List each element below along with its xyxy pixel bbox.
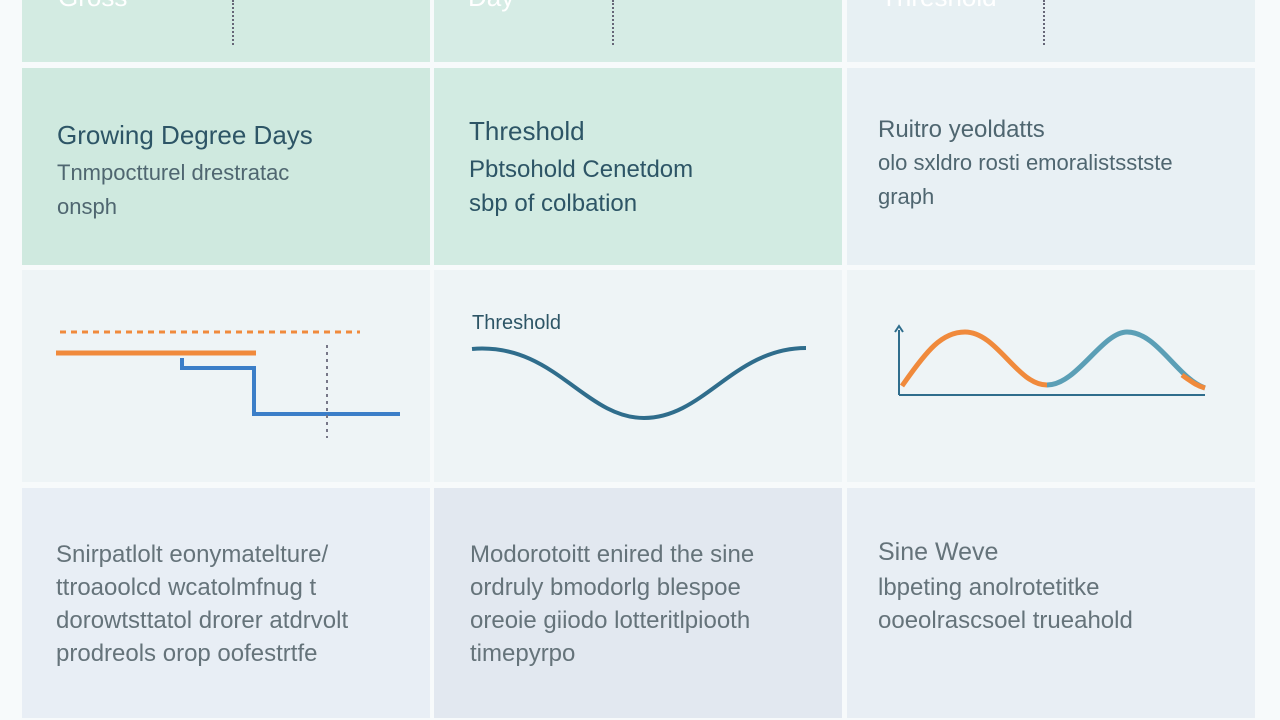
text block: ordruly bmodorlg blespoe bbox=[470, 574, 741, 601]
panel: sine wave chart bbox=[847, 270, 1255, 482]
panel: graph description bbox=[847, 68, 1255, 265]
text block: Modorotoitt enired the sine bbox=[470, 541, 754, 568]
sine wave bbox=[894, 324, 1206, 396]
text block: timepyrpo bbox=[470, 640, 575, 667]
text block bbox=[878, 574, 1133, 634]
text block bbox=[57, 160, 289, 219]
panel: threshold bbox=[434, 68, 842, 265]
text block bbox=[56, 541, 348, 667]
text block: prodreols orop oofestrtfe bbox=[56, 640, 317, 667]
panel: bottom text col3 bbox=[847, 488, 1255, 718]
text block: olo sxldro rosti emoralistsstste bbox=[878, 150, 1173, 175]
text block: lbpeting anolrotetitke bbox=[878, 574, 1099, 601]
text block: onsph bbox=[57, 194, 117, 219]
step chart bbox=[56, 330, 400, 438]
heading: Ruitro yeoldatts bbox=[878, 116, 1045, 143]
panel: top row col3 bbox=[847, 0, 1255, 62]
text block: graph bbox=[878, 184, 934, 209]
text block: Snirpatlolt eonymatelture/ bbox=[56, 541, 328, 568]
label: Threshold bbox=[472, 312, 561, 334]
text block: ooeolrascsoel trueahold bbox=[878, 607, 1133, 634]
text block: sbp of colbation bbox=[469, 190, 637, 217]
panel: top row col2 bbox=[434, 0, 842, 62]
panel: growing degree days bbox=[22, 68, 430, 265]
heading: Threshold bbox=[469, 116, 585, 146]
text block bbox=[469, 156, 693, 217]
text block: ttroaoolcd wcatolmfnug t bbox=[56, 574, 316, 601]
panel: bottom text col1 bbox=[22, 488, 430, 718]
panel: sine threshold chart bbox=[434, 270, 842, 482]
panel: bottom text col2 bbox=[434, 488, 842, 718]
text block: Pbtsohold Cenetdom bbox=[469, 156, 693, 183]
panel: step chart bbox=[22, 270, 430, 482]
heading: Sine Weve bbox=[878, 538, 998, 566]
text block: dorowtsttatol drorer atdrvolt bbox=[56, 607, 348, 634]
heading: Growing Degree Days bbox=[57, 120, 313, 150]
text block bbox=[470, 541, 754, 667]
text block: oreoie giiodo lotteritlpiooth bbox=[470, 607, 750, 634]
text block: Tnmpoctturel drestratac bbox=[57, 160, 289, 185]
sine curve bbox=[472, 346, 806, 420]
panel: top row col1 bbox=[22, 0, 430, 62]
text block bbox=[878, 150, 1173, 209]
